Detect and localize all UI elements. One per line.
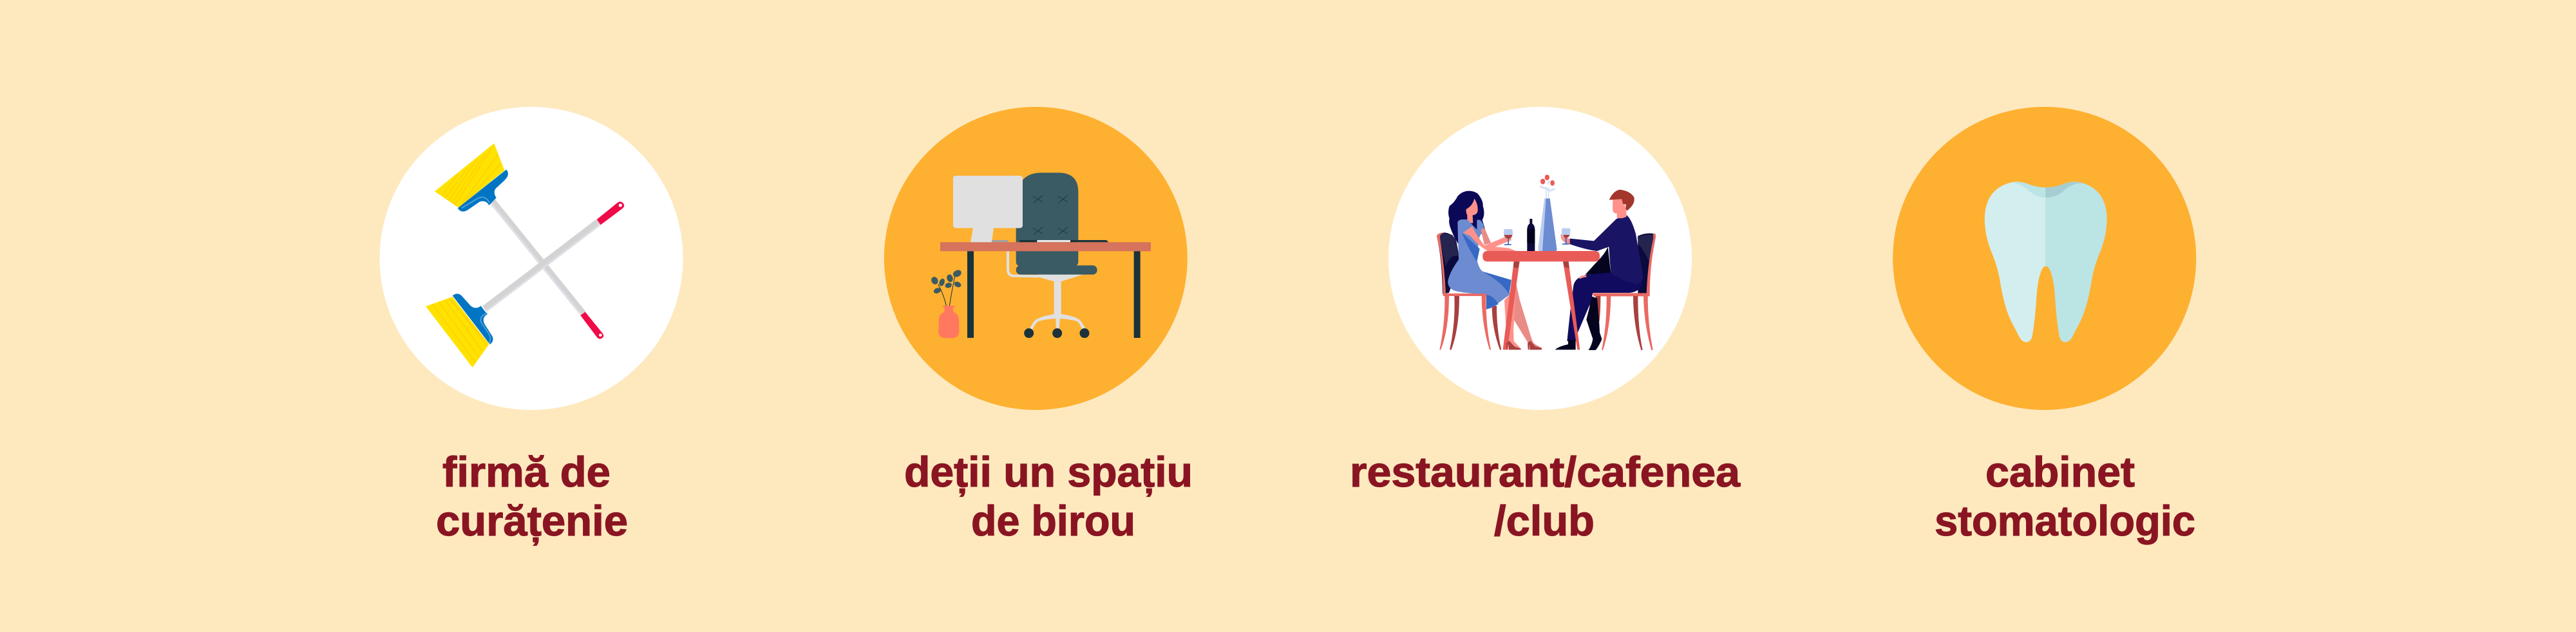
heading: deții un spațiu de birou: de birou (971, 497, 1135, 544)
heading: firmă de curățenie: firmă de (442, 448, 611, 496)
panel: firmă de curățenie (380, 107, 683, 546)
heading: cabinet stomatologic (1935, 448, 2195, 544)
heading: firmă de curățenie (436, 448, 628, 546)
heading: deții un spațiu de birou: deții un spațiu (904, 448, 1193, 497)
heading: cabinet stomatologic: stomatologic (1935, 497, 2195, 544)
heading: firmă de curățenie: curățenie (436, 497, 628, 546)
panel: cabinet stomatologic (1893, 107, 2196, 544)
circle: white background (1388, 107, 1692, 410)
circle: white background (380, 107, 683, 410)
heading: restaurant/cafenea/club: /club (1494, 497, 1595, 544)
icon: tooth (1985, 181, 2107, 342)
heading: deții un spațiu de birou (904, 448, 1193, 544)
heading: restaurant/cafenea/club: restaurant/cafenea (1350, 448, 1741, 496)
heading: cabinet stomatologic: cabinet (1985, 448, 2135, 496)
heading: restaurant/cafenea/club (1350, 448, 1741, 544)
icon: couple at restaurant table (1437, 174, 1656, 350)
icon: crossed brooms (426, 144, 624, 367)
panel: deții un spațiu de birou (884, 107, 1193, 544)
circle: orange background (1893, 107, 2196, 410)
icon: office desk with chair (930, 172, 1151, 338)
panel: restaurant/cafenea/club (1350, 107, 1741, 544)
circle: orange background (884, 107, 1188, 410)
